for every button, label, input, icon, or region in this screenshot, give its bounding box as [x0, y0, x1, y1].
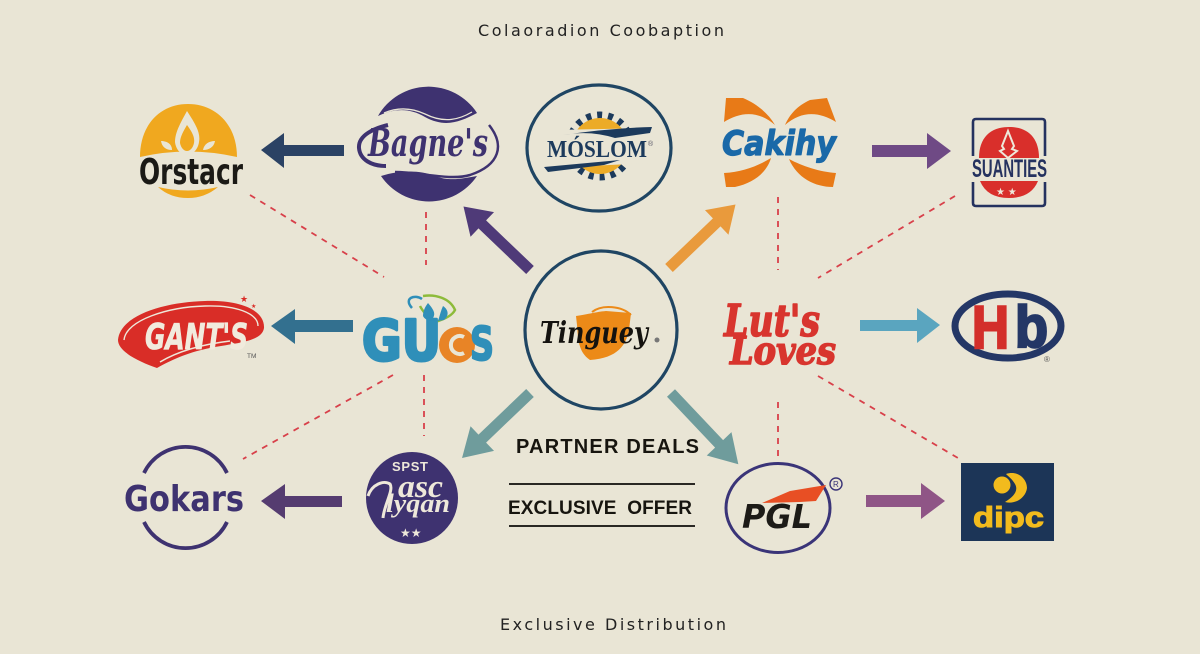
- logo: Gokars: [124, 447, 244, 548]
- logo: Orstacr: Orstacr: [139, 152, 243, 193]
- arrow: to Cakihy: [657, 192, 747, 280]
- logo: Hb: b: [1015, 295, 1048, 360]
- logo: SPST: lyqan: [386, 489, 450, 518]
- logo: Moslom: MÓSLOM: [547, 136, 647, 163]
- arrow: to Hb: [860, 308, 940, 343]
- logo: Lut's Loves: [722, 296, 836, 373]
- logo: dipc: dipc: [973, 502, 1044, 534]
- logo: Gant's: TM: [247, 353, 256, 360]
- logo: Cakihy: [722, 98, 838, 187]
- logo: PGL: [726, 464, 842, 552]
- logo: Bagne's: [359, 87, 498, 201]
- arrow: to SPST: [450, 381, 542, 470]
- arrow: to Gant's: [271, 309, 353, 344]
- logo: Gokars: Gokars: [124, 479, 244, 520]
- center logo: Tinguey: [525, 251, 677, 409]
- arrow: to Orstacr: [261, 133, 344, 168]
- logo: Suanties: [972, 119, 1047, 206]
- logo: Lut's Loves: Lut's: [722, 296, 820, 347]
- logo: SPST: SPST: [392, 459, 428, 474]
- arrow: to Gokars: [261, 484, 342, 519]
- title: Colaoradion Coobaption: [478, 21, 724, 40]
- logo: Gant's: ★: [240, 294, 248, 304]
- footer caption: Exclusive Distribution: [500, 615, 726, 634]
- logo: Gugs: S: [470, 317, 494, 371]
- arrow: to Suanties: [872, 133, 951, 169]
- arrow: to dipc: [866, 483, 945, 519]
- logo: SPST: asc: [398, 468, 443, 504]
- logo: Suanties: ★ ★: [996, 187, 1017, 198]
- logo: Gant's: GANT'S: [145, 317, 248, 358]
- heading: partner deals: PARTNER DEALS: [516, 436, 699, 458]
- logo: Hb: H: [972, 294, 1009, 361]
- logo: Cakihy: Cakihy: [722, 124, 838, 164]
- logo: PGL: PGL: [742, 497, 812, 536]
- logo: SPST: [366, 452, 458, 544]
- logo: Suanties: SUANTIES: [972, 155, 1047, 183]
- badge: exclusive offer: EXCLUSIVE OFFER: [508, 498, 692, 519]
- logo: Gugs: GU: [362, 309, 441, 374]
- logo: Moslom: [527, 85, 671, 211]
- logo: Hb: [955, 294, 1061, 364]
- center logo: Tinguey: Tinguey: [540, 316, 650, 351]
- logo: Gant's: ★: [251, 303, 256, 310]
- logo: Gugs: [362, 296, 494, 374]
- logo: PGL: R: [833, 480, 839, 489]
- arrow: to PGL: [659, 381, 751, 476]
- arrow: to Bagne's: [452, 194, 542, 282]
- logo: dipc: [961, 463, 1054, 541]
- logo: Orstacr: [139, 104, 243, 198]
- logo: SPST: ★★: [400, 526, 422, 540]
- logo: Bagne's: Bagne's: [367, 120, 488, 165]
- logo: Lut's Loves: Loves: [729, 328, 836, 373]
- logo: Gant's: [118, 294, 264, 368]
- logo: Moslom: ®: [648, 140, 654, 148]
- logo: Hb: ®: [1044, 355, 1050, 364]
